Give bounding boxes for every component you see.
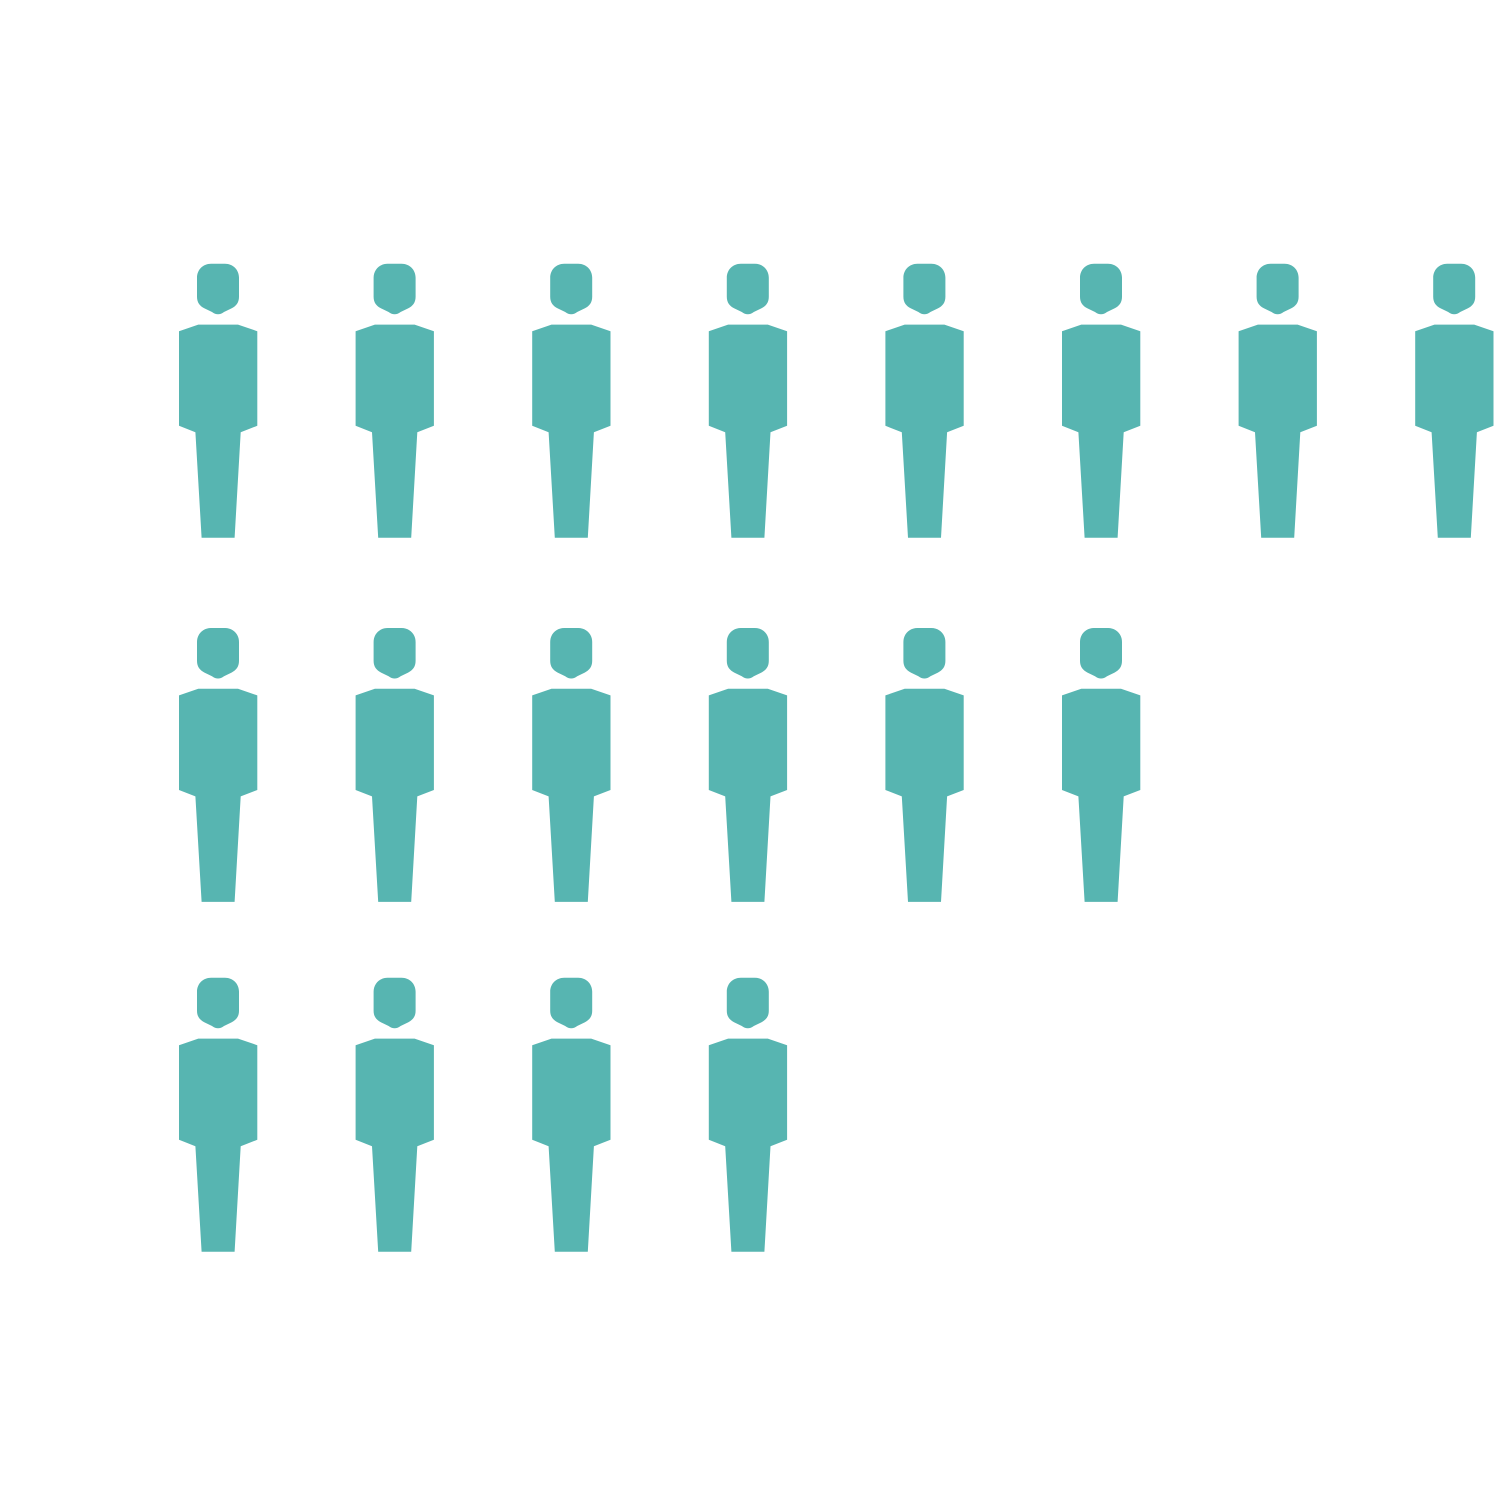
person icon 15 (179, 978, 257, 1252)
person icon 8 (1415, 264, 1494, 538)
person icon 1 (179, 264, 257, 538)
person icon 17 (532, 978, 610, 1252)
person icon 6 (1062, 264, 1140, 538)
person icon 16 (356, 978, 434, 1252)
row 2: six people (179, 628, 1140, 902)
person icon 5 (885, 264, 964, 538)
person icon 12 (709, 628, 787, 902)
row 1: eight people (179, 264, 1494, 538)
row 3: four people (179, 978, 787, 1252)
person icon 14 (1062, 628, 1140, 902)
person icon 2 (356, 264, 434, 538)
person icon 18 (709, 978, 787, 1252)
person icon 3 (532, 264, 610, 538)
person icon 11 (532, 628, 610, 902)
person icon 13 (885, 628, 964, 902)
person icon 7 (1239, 264, 1317, 538)
person icon 9 (179, 628, 257, 902)
person icon 4 (709, 264, 787, 538)
person icon 10 (356, 628, 434, 902)
